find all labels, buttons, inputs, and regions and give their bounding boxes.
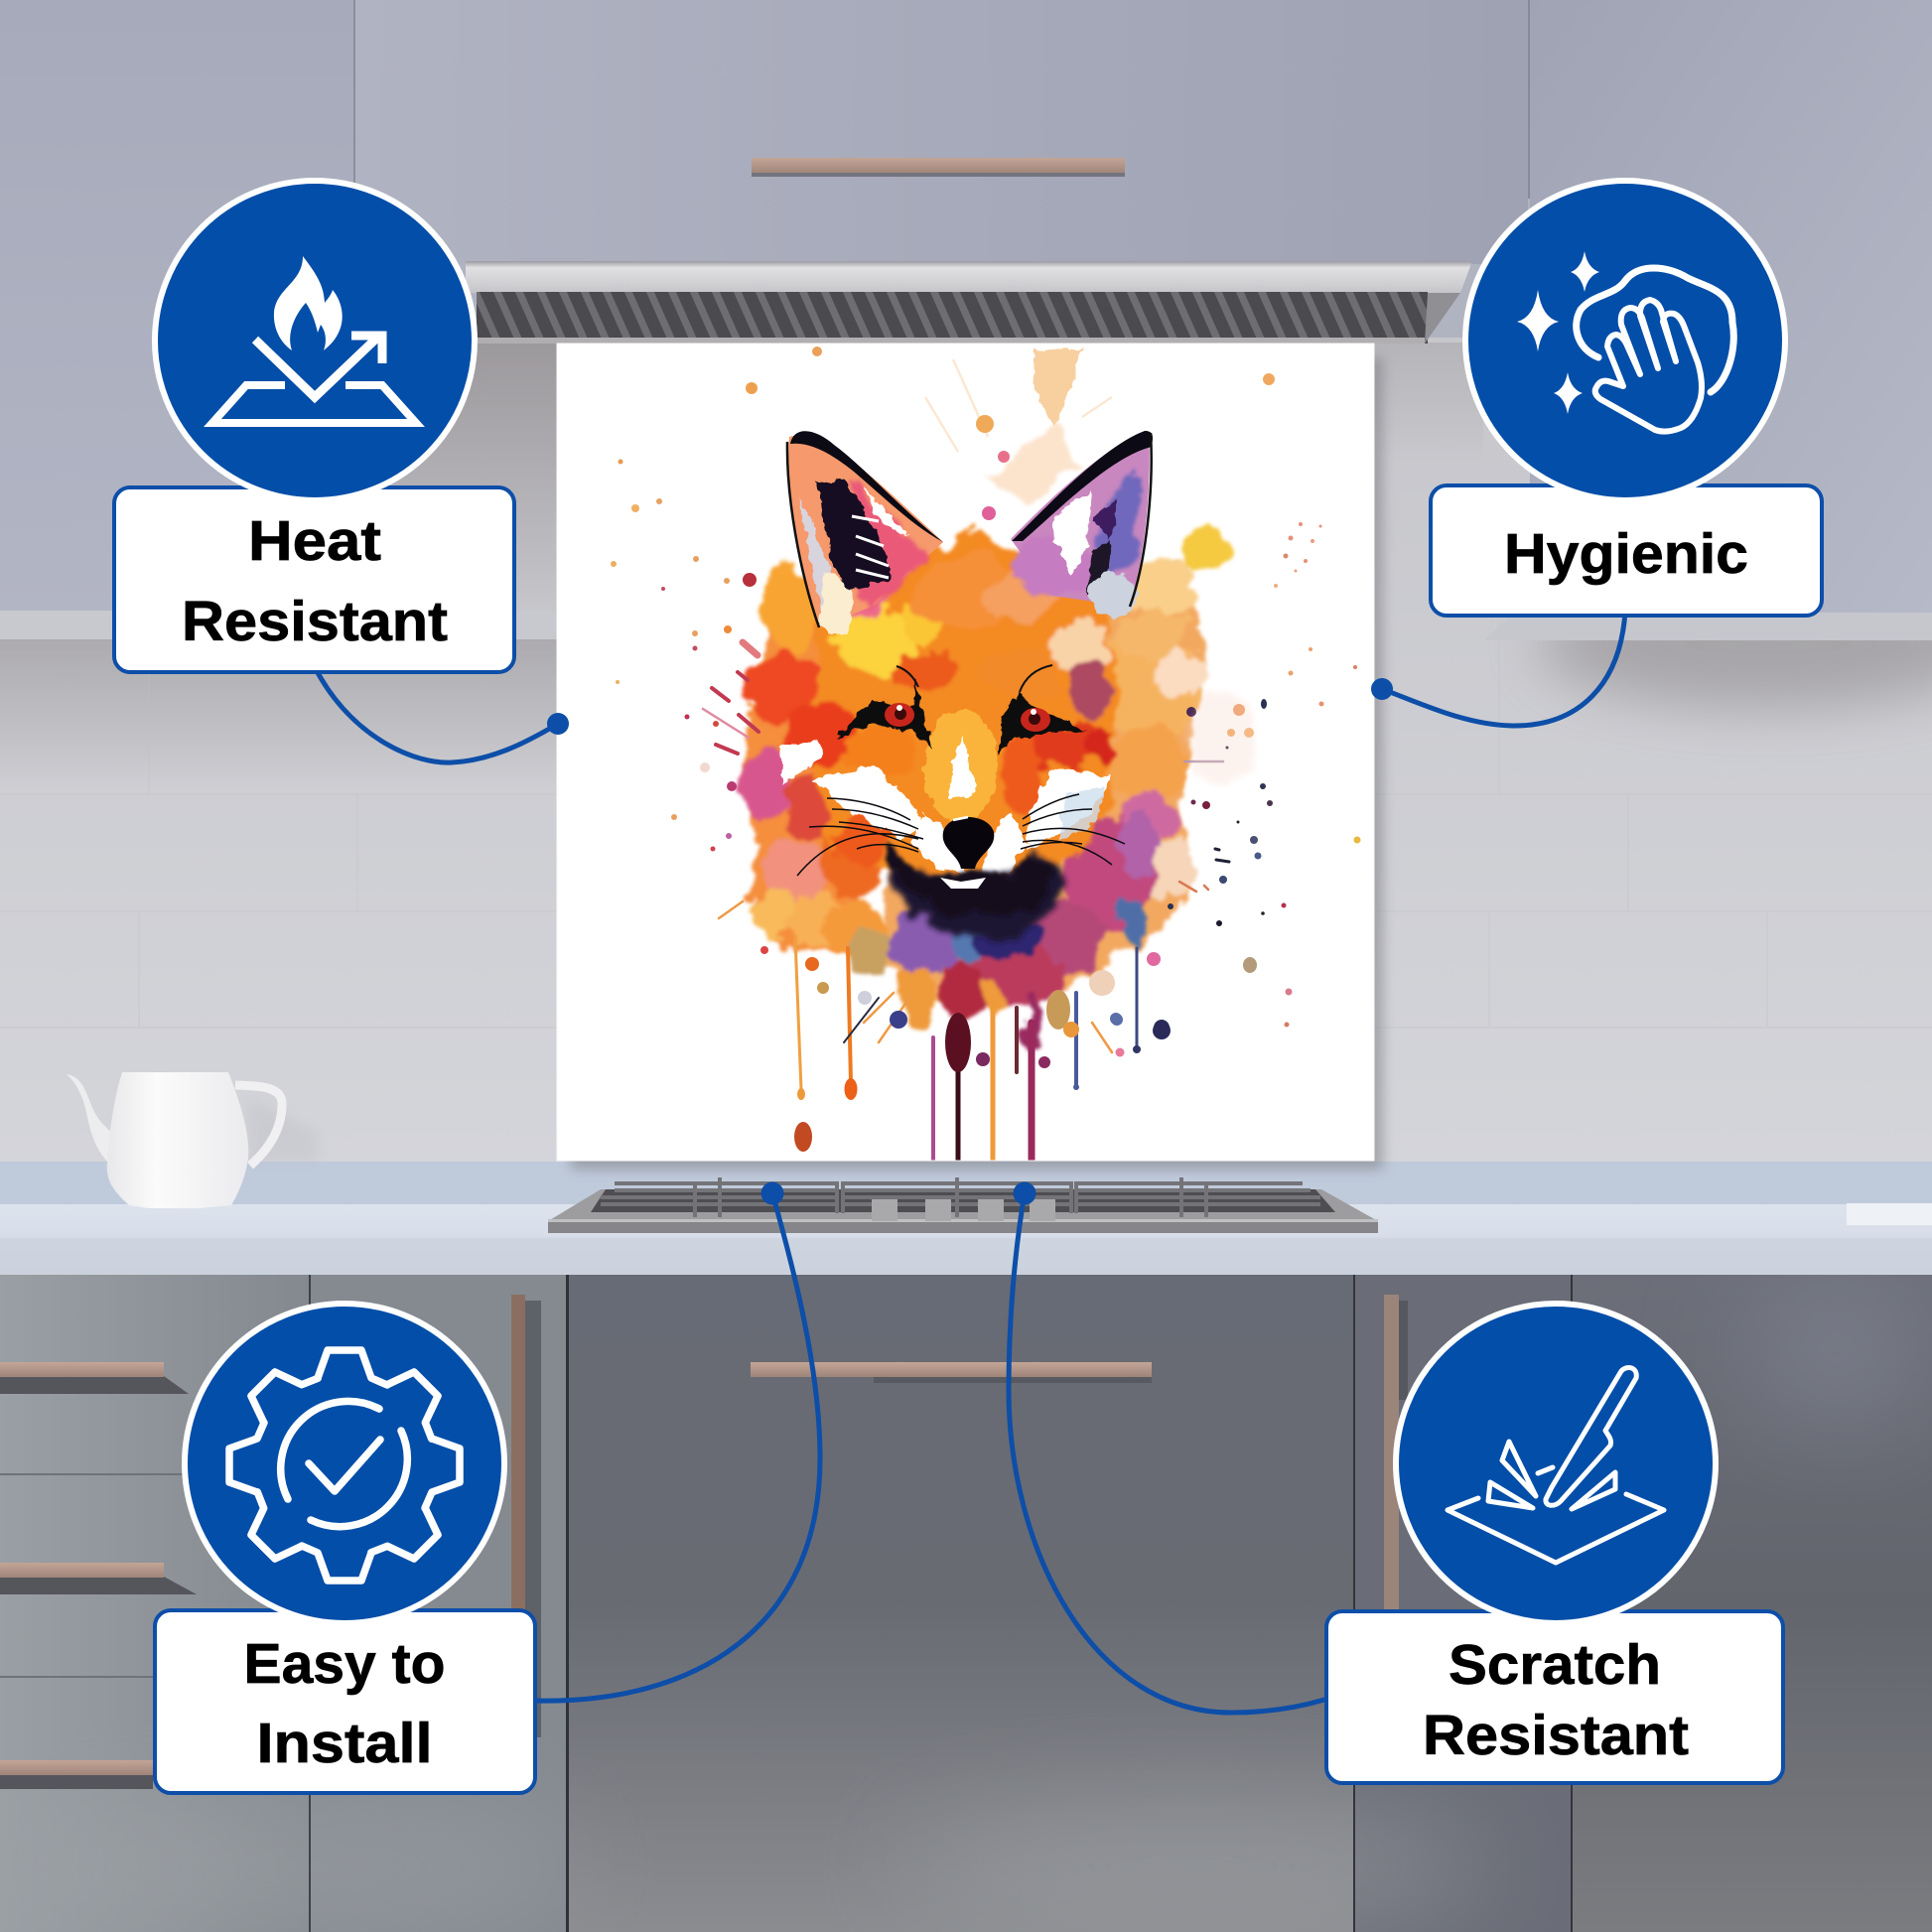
label text: Resistant [1423, 1704, 1689, 1767]
range hood [466, 261, 1472, 344]
wall [0, 338, 1932, 1172]
label box [1326, 1611, 1783, 1783]
connector: hygienic [1371, 612, 1625, 726]
icon: knife scratching a surface [1448, 1367, 1664, 1563]
muzzle and blaze [779, 709, 1112, 874]
label text: Heat [248, 509, 381, 573]
icon: flame over surface with arrow [212, 256, 416, 423]
label text: Install [256, 1712, 433, 1775]
lower cabinets [0, 1275, 1932, 1932]
icon: gear with check mark [229, 1350, 460, 1581]
whiskers [797, 794, 1125, 876]
label box [1431, 485, 1822, 616]
shadow behind panel [571, 357, 1383, 1170]
watercolor washes [739, 524, 1228, 1050]
eyes [836, 665, 1089, 755]
peach top splash [925, 347, 1112, 506]
cooktop [548, 1177, 1378, 1233]
icon: hand wiping with sparkles [1517, 251, 1733, 432]
callout: easy to install [155, 1304, 535, 1793]
mouth highlight [940, 878, 986, 889]
nose [943, 817, 994, 869]
teapot [67, 1072, 318, 1208]
upper cabinet handle [752, 158, 1125, 177]
callout: hygienic [1431, 181, 1822, 616]
callout: heat resistant [114, 181, 514, 672]
left ear [787, 431, 943, 635]
icon disc [185, 1304, 504, 1623]
icon disc [1465, 181, 1785, 500]
dark chin [892, 849, 1060, 942]
label box [155, 1610, 535, 1793]
paint drips [703, 642, 1229, 1160]
connector: heat resistant [315, 667, 569, 762]
upper cabinets [0, 0, 397, 613]
label text: Resistant [182, 590, 448, 653]
callout: scratch resistant [1326, 1304, 1783, 1783]
connector: easy to install [537, 1181, 820, 1701]
label text: Scratch [1449, 1633, 1661, 1697]
fox artwork panel [557, 344, 1374, 1161]
watercolor base mass [743, 561, 1203, 1003]
icon disc [1396, 1304, 1716, 1623]
label box [114, 487, 514, 672]
countertop [0, 1162, 1932, 1205]
label text: Easy to [244, 1632, 445, 1696]
cabinet handles [0, 1295, 1408, 1789]
label text: Hygienic [1504, 522, 1748, 586]
connector: scratch resistant [1009, 1181, 1324, 1713]
fox head colour [783, 531, 1117, 874]
paint splatter dots [611, 346, 1360, 1152]
icon disc [155, 181, 475, 500]
right ear [1009, 431, 1153, 618]
